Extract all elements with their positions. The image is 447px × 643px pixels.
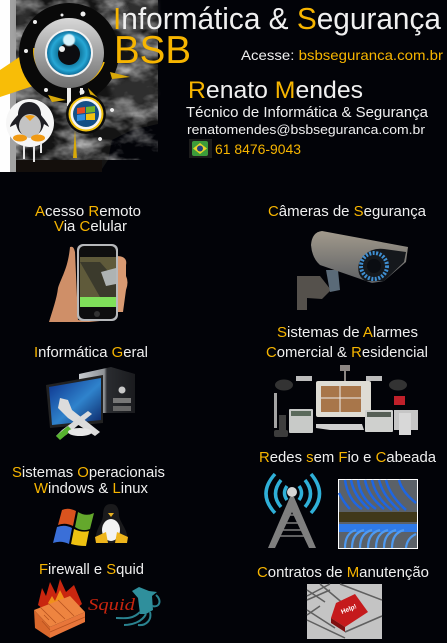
heading: sistemas de alarmes	[266, 325, 428, 361]
header artwork	[0, 0, 158, 172]
photo: keyboard help key	[307, 584, 382, 639]
decorative splashes	[48, 72, 130, 158]
photo: keyboard help key: Help!	[340, 603, 358, 616]
heading: acesso remoto: Acesso Remoto	[35, 204, 141, 220]
subtitle BSB: BSB	[114, 29, 191, 72]
heading: redes sem fio e cabeada: Redes sem Fio e Cabeada	[259, 450, 437, 466]
heading: sistemas de alarmes: Sistemas de Alarmes	[277, 325, 418, 341]
icon: eye	[19, 3, 119, 103]
heading: firewall e squid: Firewall e Squid	[39, 562, 144, 578]
icon: squid: Squid	[88, 595, 136, 614]
icon: brazil flag	[189, 139, 212, 158]
icon: phone in hand	[49, 244, 128, 322]
heading: informática geral: Informática Geral	[34, 345, 148, 361]
photo: network cables	[338, 479, 418, 549]
heading: câmeras de segurança: Câmeras de Segurança	[268, 204, 427, 220]
icon: computer and tools	[46, 367, 135, 440]
icon: penguin badge	[6, 99, 54, 162]
heading: sistemas de alarmes: Comercial & Residencial	[266, 345, 428, 361]
heading: sistemas operacionais: Windows & Linux	[34, 481, 149, 497]
icon: firewall	[34, 579, 85, 638]
email: renatomendes@bsbseguranca.com.br	[187, 122, 426, 137]
icon: alarm equipment	[274, 365, 418, 437]
icon: tux penguin	[95, 504, 128, 543]
heading: acesso remoto: Via Celular	[54, 219, 127, 235]
heading: acesso remoto	[35, 204, 141, 235]
icon: windows logo	[53, 509, 94, 546]
heading: sistemas operacionais: Sistemas Operacionais	[12, 465, 165, 481]
icon: yellow wedge	[0, 48, 36, 97]
icon: windows badge	[66, 94, 106, 134]
heading: contratos de manutenção: Contratos de Manutenção	[257, 565, 429, 581]
phone number: 61 8476-9043	[215, 141, 301, 157]
heading: sistemas operacionais	[12, 465, 165, 497]
icon: wireless tower	[266, 474, 320, 548]
icon: squid	[88, 587, 159, 625]
title: Informática & Segurança	[113, 1, 442, 36]
icon: security camera	[297, 231, 408, 310]
website: Acesse: bsbseguranca.com.br	[241, 47, 443, 63]
job title: Técnico de Informática & Segurança	[186, 105, 429, 121]
contact name: Renato Mendes	[188, 77, 363, 104]
